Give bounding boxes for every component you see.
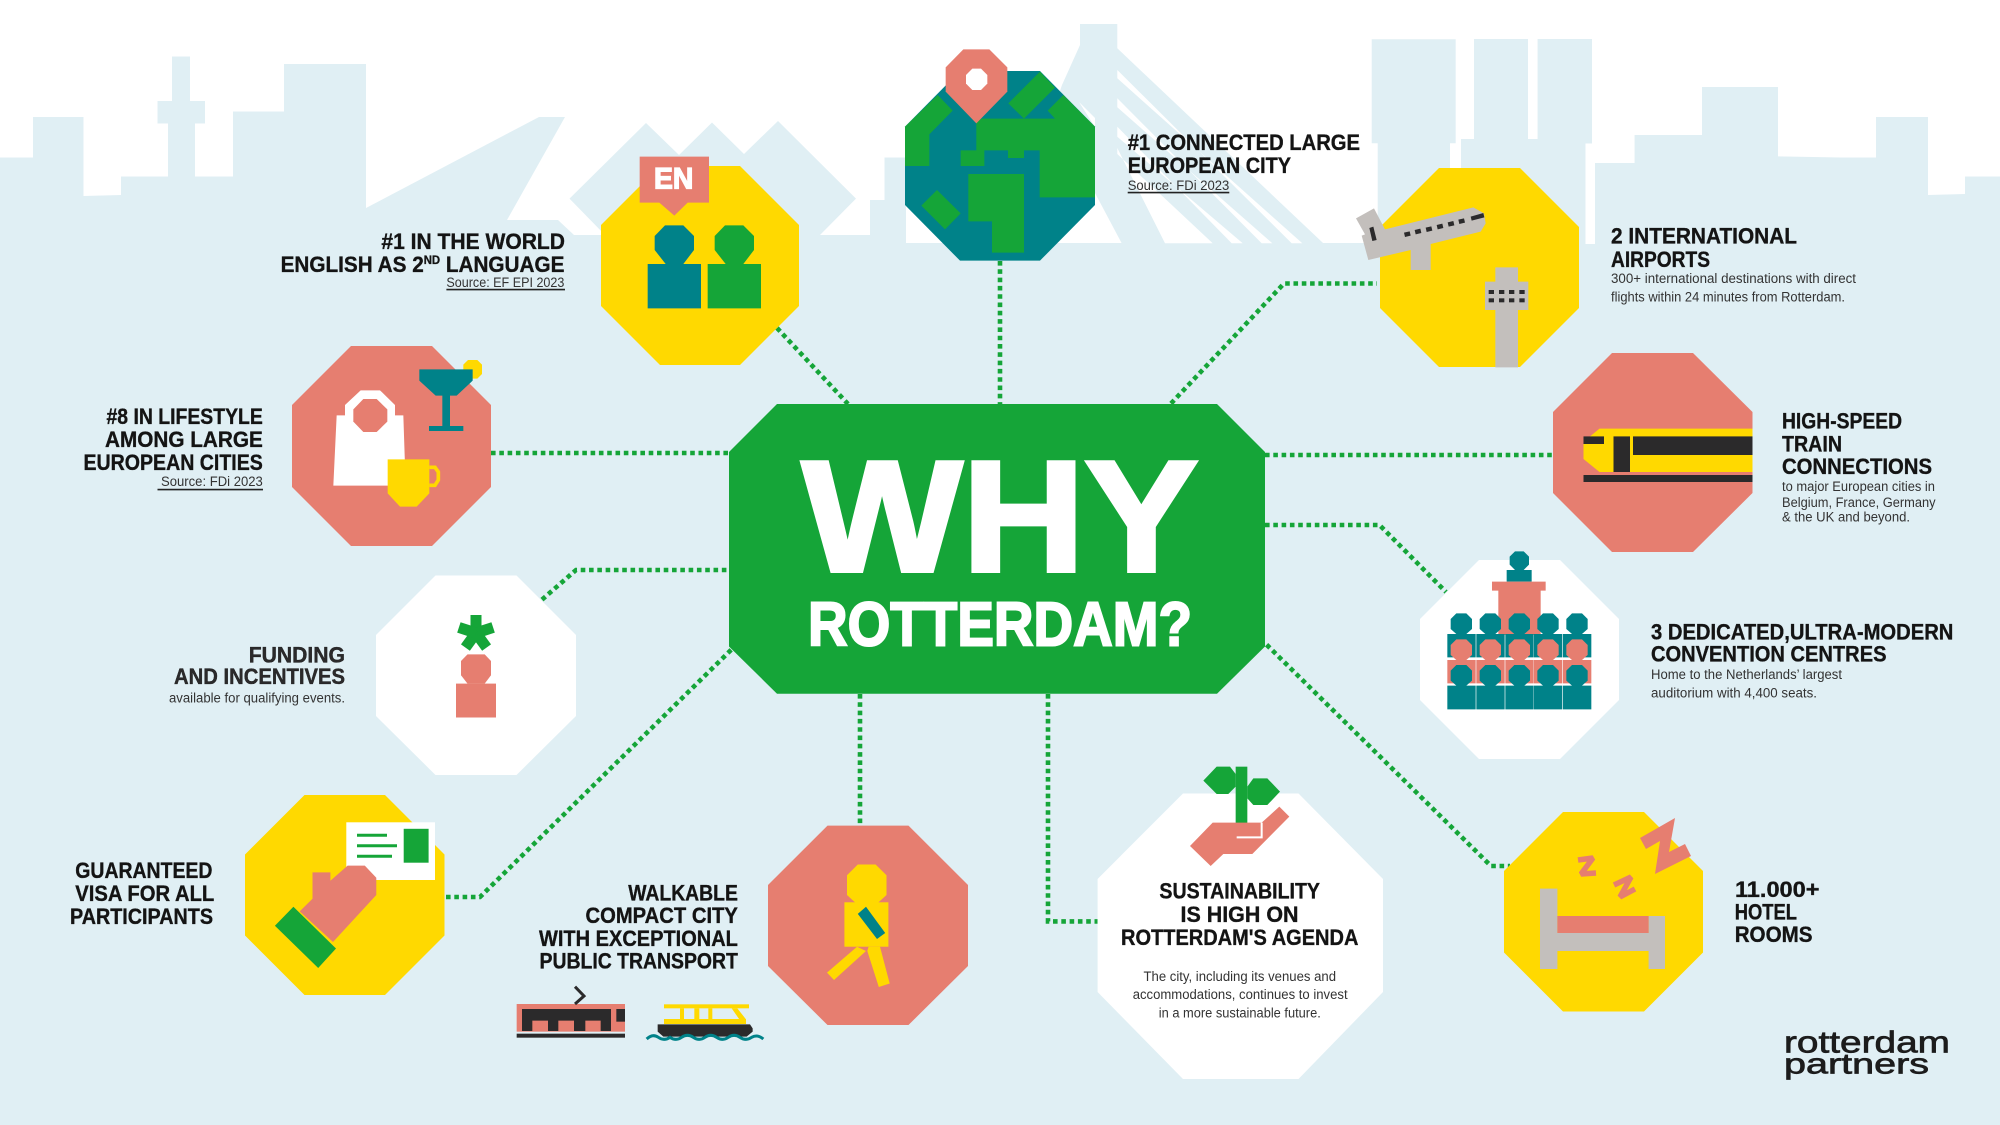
text: convention centres bbox=[1651, 619, 1953, 700]
icon: bed with zzz bbox=[1504, 812, 1703, 1012]
heading: ROTTERDAM?: ROTTERDAM? bbox=[808, 590, 1192, 660]
panel: walkable city bbox=[517, 826, 968, 1039]
text: sustainability heading: ROTTERDAM'S AGENDA bbox=[1121, 925, 1359, 950]
text: visa: VISA FOR ALL bbox=[75, 881, 214, 906]
icon: globe bbox=[905, 49, 1095, 261]
text: sustainability description: in a more sustainable future. bbox=[1159, 1006, 1321, 1020]
text: high-speed train bbox=[1782, 409, 1936, 524]
text: walkable city: WALKABLE bbox=[628, 880, 738, 906]
text: english language: ND bbox=[424, 253, 440, 267]
panel: funding bbox=[169, 576, 576, 775]
text: sustainability description: The city, including its venues and bbox=[1144, 969, 1336, 984]
text: high-speed train: & the UK and beyond. bbox=[1782, 509, 1910, 524]
text: convention centres: 3 DEDICATED,ULTRA-MODERN bbox=[1651, 619, 1953, 644]
text: funding bbox=[169, 643, 345, 705]
text: sustainability heading bbox=[1121, 879, 1359, 950]
heading: WHY: WHY bbox=[802, 429, 1198, 605]
panel: airports bbox=[1356, 168, 1856, 367]
text: lifestyle: EUROPEAN CITIES bbox=[84, 450, 263, 475]
text: airports bbox=[1611, 224, 1856, 304]
text: english language: LANGUAGE bbox=[440, 252, 564, 277]
panel: sustainability bbox=[1098, 767, 1383, 1079]
icon: speaker and audience bbox=[1420, 551, 1619, 759]
text: english language: Source: EF EPI 2023 bbox=[446, 275, 564, 290]
panel: english language bbox=[281, 157, 799, 365]
panel: visa bbox=[70, 795, 444, 995]
text: airports: flights within 24 minutes from Rotterdam. bbox=[1611, 290, 1845, 304]
connector lines bbox=[446, 261, 1553, 921]
text: english language: #1 IN THE WORLD bbox=[381, 229, 565, 254]
icon: tram and ferry bbox=[517, 987, 763, 1039]
text: airports: 300+ international destinations with direct bbox=[1611, 271, 1856, 286]
logo: rotterdam partners: rotterdam bbox=[1784, 1025, 1950, 1060]
panel: connected city bbox=[905, 49, 1360, 261]
text: sustainability description bbox=[1133, 969, 1348, 1020]
text: connected city: #1 CONNECTED LARGE bbox=[1128, 130, 1360, 155]
text: sustainability description: accommodations, continues to invest bbox=[1133, 987, 1348, 1002]
text: walkable city: COMPACT CITY bbox=[586, 903, 738, 928]
text: lifestyle: AMONG LARGE bbox=[105, 427, 263, 452]
icon: plant in hand bbox=[1190, 767, 1289, 866]
text: high-speed train: CONNECTIONS bbox=[1782, 454, 1932, 479]
text: hotel rooms: ROOMS bbox=[1735, 922, 1812, 947]
icon: speech bubble and two people bbox=[601, 157, 799, 365]
text: hotel rooms: 11.000+ bbox=[1735, 877, 1820, 902]
text: airports: AIRPORTS bbox=[1611, 247, 1710, 272]
text: hotel rooms bbox=[1735, 877, 1820, 947]
icon: person with asterisk bbox=[376, 576, 576, 775]
text: high-speed train: HIGH-SPEED bbox=[1782, 409, 1902, 434]
text: sustainability heading: IS HIGH ON bbox=[1180, 902, 1298, 927]
text: walkable city: PUBLIC TRANSPORT bbox=[540, 948, 738, 973]
central panel: why rotterdam bbox=[729, 404, 1265, 694]
text: convention centres: Home to the Netherlands’ largest bbox=[1651, 667, 1842, 682]
text: english language: ENGLISH AS 2 bbox=[281, 252, 433, 277]
text: high-speed train: Belgium, France, Germany bbox=[1782, 495, 1936, 510]
text: connected city bbox=[1128, 130, 1360, 193]
text: funding: available for qualifying events. bbox=[169, 690, 345, 705]
icon: train bbox=[1553, 353, 1752, 552]
text: lifestyle bbox=[84, 404, 263, 490]
text: visa: GUARANTEED bbox=[75, 858, 212, 883]
text: funding: AND INCENTIVES bbox=[174, 664, 345, 689]
text: connected city: EUROPEAN CITY bbox=[1128, 153, 1291, 178]
icon: hand holding visa card bbox=[245, 795, 444, 995]
text: sustainability heading: SUSTAINABILITY bbox=[1159, 879, 1320, 904]
panel: convention centres bbox=[1420, 551, 1953, 759]
icon: speech bubble and two people: EN bbox=[654, 162, 693, 195]
logo: rotterdam partners: partners bbox=[1784, 1048, 1929, 1080]
text: convention centres: CONVENTION CENTRES bbox=[1651, 642, 1886, 667]
text: hotel rooms: HOTEL bbox=[1735, 900, 1797, 925]
text: airports: 2 INTERNATIONAL bbox=[1611, 224, 1797, 249]
text: visa bbox=[70, 858, 214, 929]
text: high-speed train: TRAIN bbox=[1782, 431, 1842, 456]
text: funding: FUNDING bbox=[249, 643, 345, 668]
panel: lifestyle bbox=[84, 346, 491, 546]
text: visa: PARTICIPANTS bbox=[70, 904, 213, 929]
icon: plane and control tower bbox=[1356, 168, 1579, 367]
text: convention centres: auditorium with 4,400 seats. bbox=[1651, 686, 1817, 700]
panel: high-speed train bbox=[1553, 353, 1936, 552]
logo: rotterdam partners bbox=[1784, 1025, 1950, 1080]
panel: hotel rooms bbox=[1504, 812, 1820, 1012]
text: high-speed train: to major European cities in bbox=[1782, 479, 1935, 494]
icon: walking person bbox=[768, 826, 968, 1025]
text: english language bbox=[281, 229, 565, 290]
text: walkable city bbox=[539, 880, 738, 973]
text: walkable city: WITH EXCEPTIONAL bbox=[539, 926, 738, 951]
icon: bag, cocktail and mug bbox=[292, 346, 491, 546]
text: lifestyle: Source: FDi 2023 bbox=[161, 474, 263, 489]
text: connected city: Source: FDi 2023 bbox=[1128, 178, 1229, 193]
text: lifestyle: #8 IN LIFESTYLE bbox=[106, 404, 263, 429]
